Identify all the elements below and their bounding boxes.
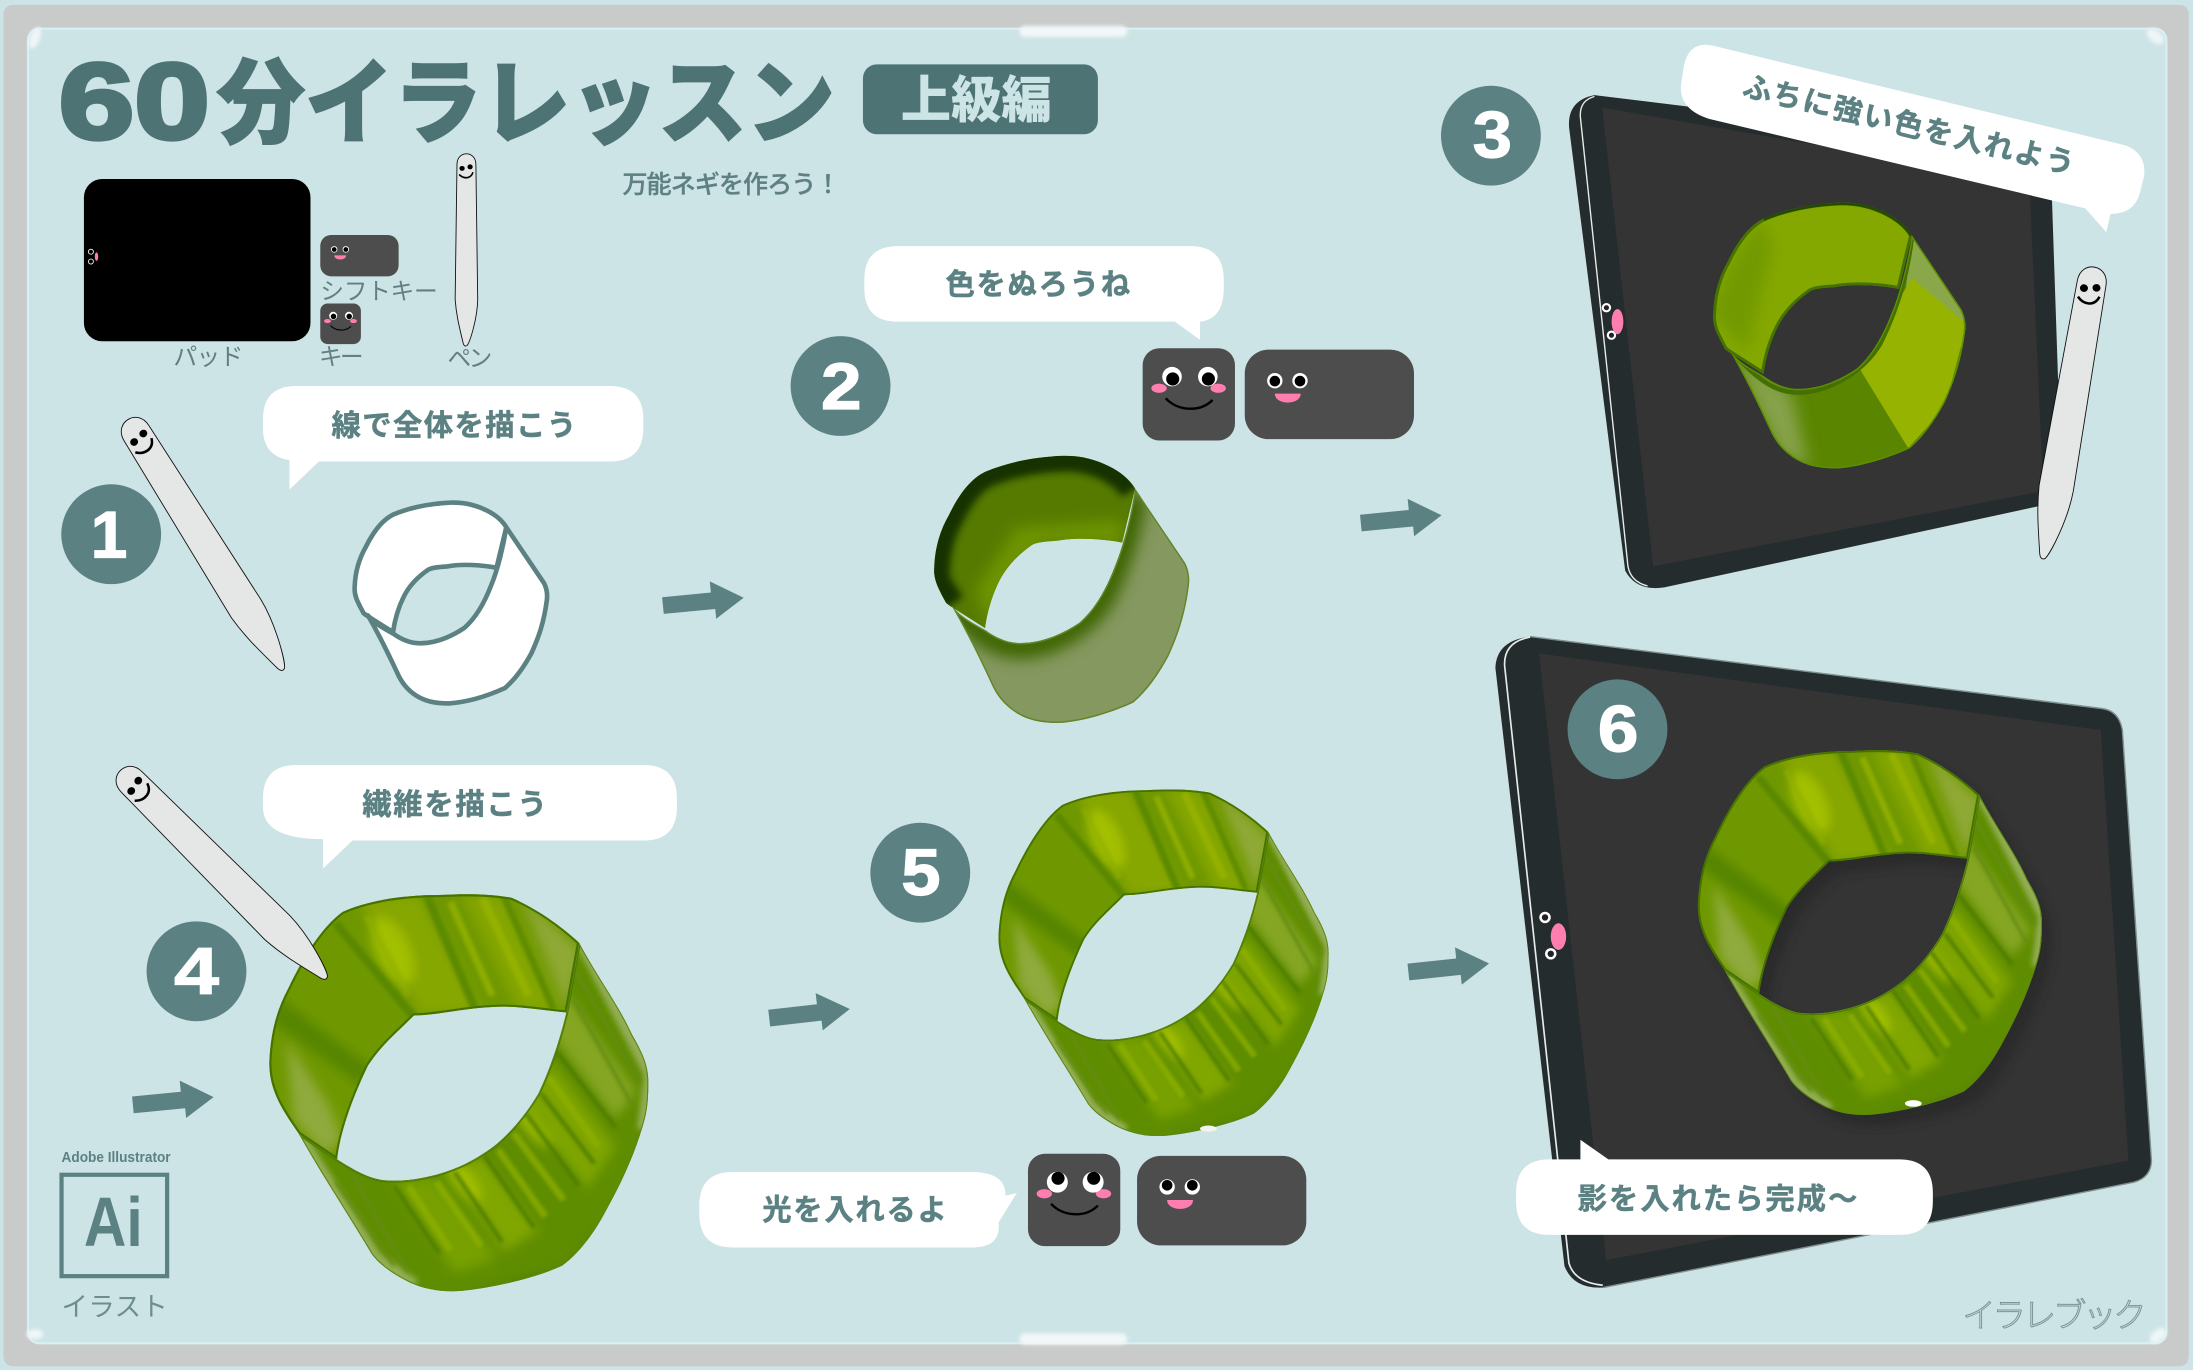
- step 2 callout: 色をぬろうね: [945, 268, 1130, 301]
- step 5 key character: [1028, 1154, 1120, 1246]
- Adobe Illustrator logo: イラスト: [62, 1292, 168, 1322]
- step 6 number: [1568, 679, 1667, 779]
- legend: key: キー: [319, 344, 364, 371]
- arrow 1 to 2: [661, 578, 745, 624]
- step 4 callout: [263, 765, 677, 868]
- step 6 callout: [1516, 1140, 1933, 1235]
- step 3 tablet: [1569, 95, 2062, 588]
- arrow 2 to 3: [1359, 496, 1443, 541]
- legend: pen: [448, 154, 492, 372]
- step 3 number: [1441, 86, 1541, 186]
- step 1 line-art ring: [355, 503, 547, 703]
- step 5 callout: 光を入れるよ: [762, 1194, 947, 1227]
- legend: shift key: シフトキー: [320, 278, 438, 305]
- step 3 coloured ring: [1707, 195, 1972, 472]
- legend: key: [319, 303, 364, 371]
- Adobe Illustrator logo: Adobe Illustrator: [62, 1150, 171, 1166]
- step 1 callout: [263, 386, 643, 489]
- arrow 5 to 6: [1406, 944, 1491, 990]
- step 3 callout: ふちに強い色を入れよう: [1740, 70, 2078, 181]
- step 4 pen and number: [108, 758, 340, 1021]
- step 1 callout: 線で全体を描こう: [331, 410, 576, 443]
- subtitle: 万能ネギを作ろう！: [622, 171, 841, 199]
- step 2 number: 2: [821, 349, 862, 423]
- step 1 pen: [113, 410, 299, 679]
- title: [59, 41, 835, 161]
- legend: pen: ペン: [448, 345, 492, 372]
- step 2 number: [791, 336, 890, 436]
- step 2 coloured ring: [928, 448, 1196, 727]
- step 5 number: [870, 823, 970, 923]
- step 6 callout: 影を入れたら完成〜: [1578, 1183, 1857, 1216]
- step 5 number: 5: [901, 835, 941, 909]
- Adobe Illustrator logo: [62, 1150, 171, 1322]
- step 3 number: 3: [1473, 97, 1512, 171]
- step 4 callout: 繊維を描こう: [362, 789, 547, 822]
- badge: advanced level: [863, 64, 1098, 134]
- title: 分イラレッスン: [217, 52, 835, 156]
- step 2 callout: [864, 246, 1224, 340]
- site credit: イラレブック: [1962, 1297, 2147, 1335]
- legend: shift key: [320, 235, 438, 305]
- badge: advanced level: 上級編: [901, 71, 1052, 128]
- step 6 tablet: [1495, 637, 2151, 1288]
- step 6 number: 6: [1598, 692, 1638, 766]
- step 2 shift key character: [1245, 350, 1414, 439]
- Adobe Illustrator logo: Ai: [84, 1183, 143, 1261]
- step 2 key character: [1143, 348, 1235, 441]
- step 6 ring with shadow: [1682, 738, 2052, 1130]
- step 5 callout: [699, 1172, 1017, 1247]
- step 4 ring: [252, 881, 657, 1308]
- title: 60: [59, 41, 210, 161]
- legend: tablet pad: [84, 179, 310, 371]
- step 5 ring: [983, 778, 1336, 1150]
- step 3 callout: [1681, 45, 2144, 232]
- step 3 pen: [2027, 264, 2111, 562]
- step 5 shift key character: [1137, 1156, 1306, 1245]
- arrow 4 in: [131, 1078, 215, 1123]
- step 4 pen and number: 4: [174, 934, 219, 1008]
- legend: tablet pad: パッド: [173, 344, 243, 371]
- step 1 number: [61, 484, 161, 584]
- arrow 4 to 5: [767, 989, 852, 1036]
- step 1 number: 1: [91, 497, 127, 571]
